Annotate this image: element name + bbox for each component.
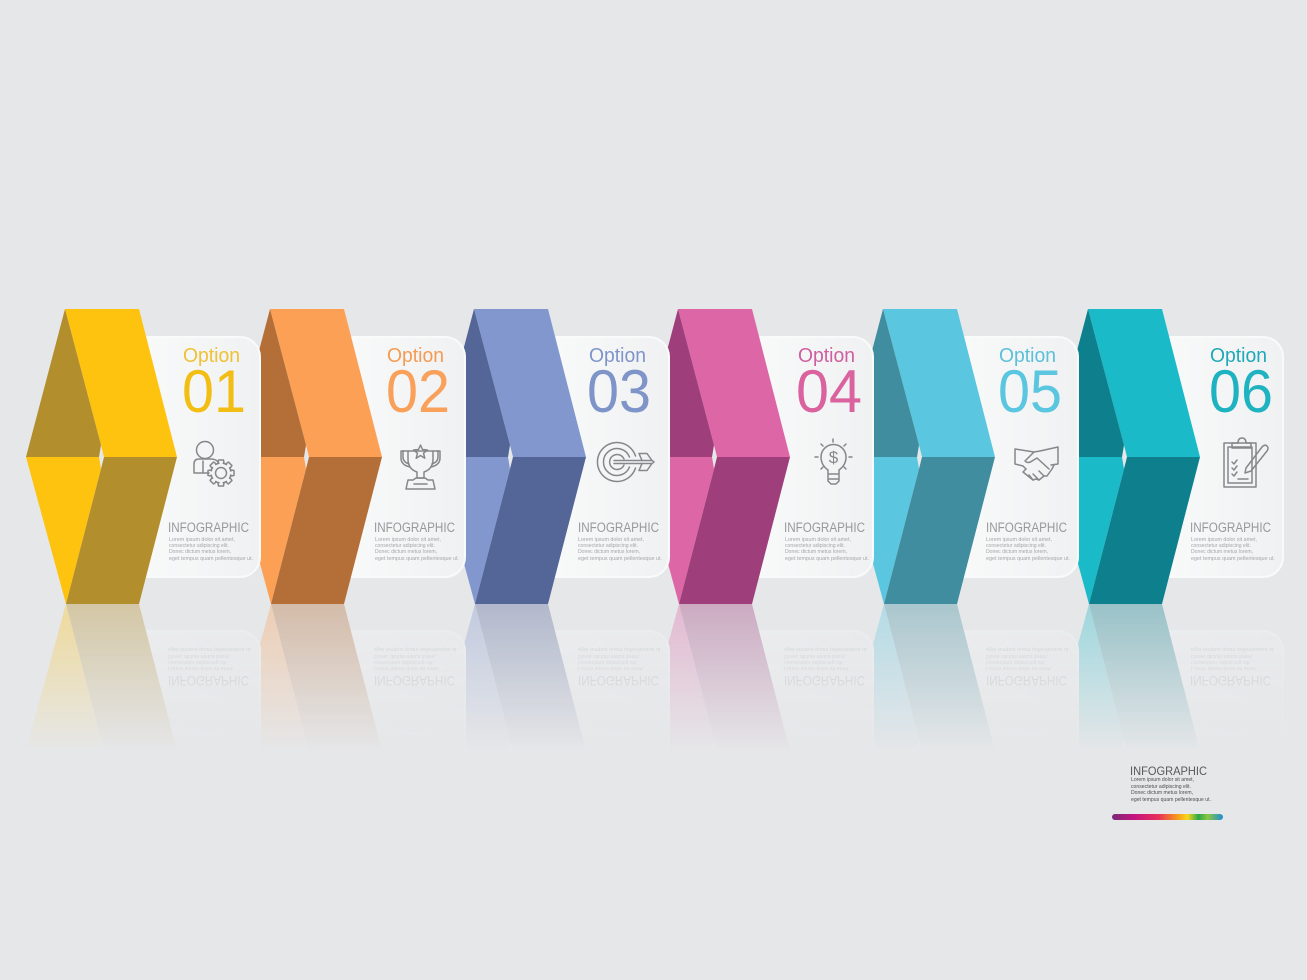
text block 05: consectetur adipiscing elit. [986,543,1046,549]
icon: light bulb with dollar: $ [829,448,839,467]
reflection of all six steps: consectetur adipiscing elit. [168,659,228,665]
reflection of all six steps: INFOGRAPHIC [374,673,455,688]
text block 05: INFOGRAPHIC [986,520,1067,535]
text block 04: consectetur adipiscing elit. [785,543,845,549]
reflection of all six steps: eget tempus quam pellentesque ut. [986,646,1070,652]
icon: person with gear [194,442,234,486]
text block 01 [168,520,253,562]
panel: option 03 [435,309,669,604]
panel: option 01 [26,309,260,604]
chevron 05 [844,309,995,604]
reflection of all six steps: consectetur adipiscing elit. [784,659,844,665]
reflection of all six steps: INFOGRAPHIC [784,673,865,688]
legend block bottom right [1112,764,1223,820]
text block 03: Lorem ipsum dolor sit amet, [578,537,644,543]
chevron 01 [26,309,177,604]
reflection of all six steps: Donec dictum metus lorem, [1191,653,1253,659]
reflection of all six steps: eget tempus quam pellentesque ut. [168,646,252,652]
card 02 [325,337,465,577]
icon: target with arrow [597,442,654,481]
text block 02: consectetur adipiscing elit. [375,543,435,549]
text block 06: consectetur adipiscing elit. [1191,543,1251,549]
chevron 03 [435,309,586,604]
reflection of all six steps: consectetur adipiscing elit. [1191,659,1251,665]
legend title: INFOGRAPHIC [1130,764,1207,778]
card 03 [529,337,669,577]
reflection of all six steps: Lorem ipsum dolor sit amet, [1191,665,1257,671]
text block 04: Donec dictum metus lorem, [785,549,847,555]
text block 06: INFOGRAPHIC [1190,520,1271,535]
text block 03: consectetur adipiscing elit. [578,543,638,549]
reflection of all six steps [30,604,1274,738]
text block 05: eget tempus quam pellentesque ut. [986,556,1070,562]
card 01 [120,337,260,577]
card 04 [733,337,873,577]
text block 02: Lorem ipsum dolor sit amet, [375,537,441,543]
text block 06 [1190,520,1275,562]
reflection of all six steps: consectetur adipiscing elit. [986,659,1046,665]
number 01: 01 [182,358,246,425]
text block 04: Lorem ipsum dolor sit amet, [785,537,851,543]
reflection of all six steps: Lorem ipsum dolor sit amet, [374,665,440,671]
text block 02 [374,520,459,562]
reflection of all six steps: Donec dictum metus lorem, [578,653,640,659]
text block 01: Donec dictum metus lorem, [169,549,231,555]
reflection of all six steps: INFOGRAPHIC [1190,673,1271,688]
reflection of all six steps: Donec dictum metus lorem, [986,653,1048,659]
reflection of all six steps: Donec dictum metus lorem, [168,653,230,659]
legend text: consectetur adipiscing elit. [1131,784,1191,790]
number 06: 06 [1209,358,1273,425]
heading 05: Option [999,345,1056,367]
icon: clipboard and pencil [1224,438,1268,487]
reflection of all six steps: INFOGRAPHIC [168,673,249,688]
text block 03: eget tempus quam pellentesque ut. [578,556,662,562]
reflection of all six steps: Donec dictum metus lorem, [374,653,436,659]
chevron 06 [1049,309,1200,604]
card 06 [1143,337,1283,577]
text block 04: INFOGRAPHIC [784,520,865,535]
text block 02: Donec dictum metus lorem, [375,549,437,555]
panel: option 02 [231,309,465,604]
reflection of all six steps: eget tempus quam pellentesque ut. [784,646,868,652]
reflection of all six steps: Lorem ipsum dolor sit amet, [784,665,850,671]
reflection of all six steps: Donec dictum metus lorem, [784,653,846,659]
reflection of all six steps: INFOGRAPHIC [986,673,1067,688]
reflection of all six steps: Lorem ipsum dolor sit amet, [986,665,1052,671]
text block 03: Donec dictum metus lorem, [578,549,640,555]
panel: option 05 [844,309,1078,604]
reflection of all six steps: consectetur adipiscing elit. [374,659,434,665]
icon: trophy [401,445,440,489]
text block 06: eget tempus quam pellentesque ut. [1191,556,1275,562]
legend text: Lorem ipsum dolor sit amet, [1131,777,1194,783]
panel: option 04 [639,309,873,604]
heading 04: Option [798,345,855,367]
text block 06: Donec dictum metus lorem, [1191,549,1253,555]
text block 01: eget tempus quam pellentesque ut. [169,556,253,562]
text block 03 [578,520,662,562]
reflection of all six steps: eget tempus quam pellentesque ut. [578,646,662,652]
text block 01: consectetur adipiscing elit. [169,543,229,549]
rainbow bar [1112,814,1223,820]
reflection of all six steps: Lorem ipsum dolor sit amet, [168,665,234,671]
reflection of all six steps: eget tempus quam pellentesque ut. [1191,646,1275,652]
text block 05 [986,520,1070,562]
heading 02: Option [387,345,444,367]
text block 03: INFOGRAPHIC [578,520,659,535]
text block 02: INFOGRAPHIC [374,520,455,535]
text block 04 [784,520,869,562]
text block 05: Donec dictum metus lorem, [986,549,1048,555]
heading 01: Option [183,345,240,367]
reflection of all six steps: Lorem ipsum dolor sit amet, [578,665,644,671]
number 03: 03 [587,358,651,425]
text block 01: Lorem ipsum dolor sit amet, [169,537,235,543]
heading 03: Option [589,345,646,367]
reflection of all six steps: consectetur adipiscing elit. [578,659,638,665]
icon: handshake [1015,447,1058,480]
number 04: 04 [796,358,862,425]
panel: option 06 [1049,309,1283,604]
text block 05: Lorem ipsum dolor sit amet, [986,537,1052,543]
chevron 04 [639,309,790,604]
text block 01: INFOGRAPHIC [168,520,249,535]
card 05 [938,337,1078,577]
chevron 02 [231,309,382,604]
number 02: 02 [386,358,450,425]
text block 02: eget tempus quam pellentesque ut. [375,556,459,562]
heading 06: Option [1210,345,1267,367]
text block 06: Lorem ipsum dolor sit amet, [1191,537,1257,543]
legend text: eget tempus quam pellentesque ut. [1131,797,1211,803]
legend text [1131,777,1211,803]
reflection of all six steps: eget tempus quam pellentesque ut. [374,646,458,652]
legend text: Donec dictum metus lorem, [1131,790,1193,796]
reflection of all six steps: INFOGRAPHIC [578,673,659,688]
number 05: 05 [998,358,1062,425]
icon: light bulb with dollar [815,439,852,484]
text block 04: eget tempus quam pellentesque ut. [785,556,869,562]
